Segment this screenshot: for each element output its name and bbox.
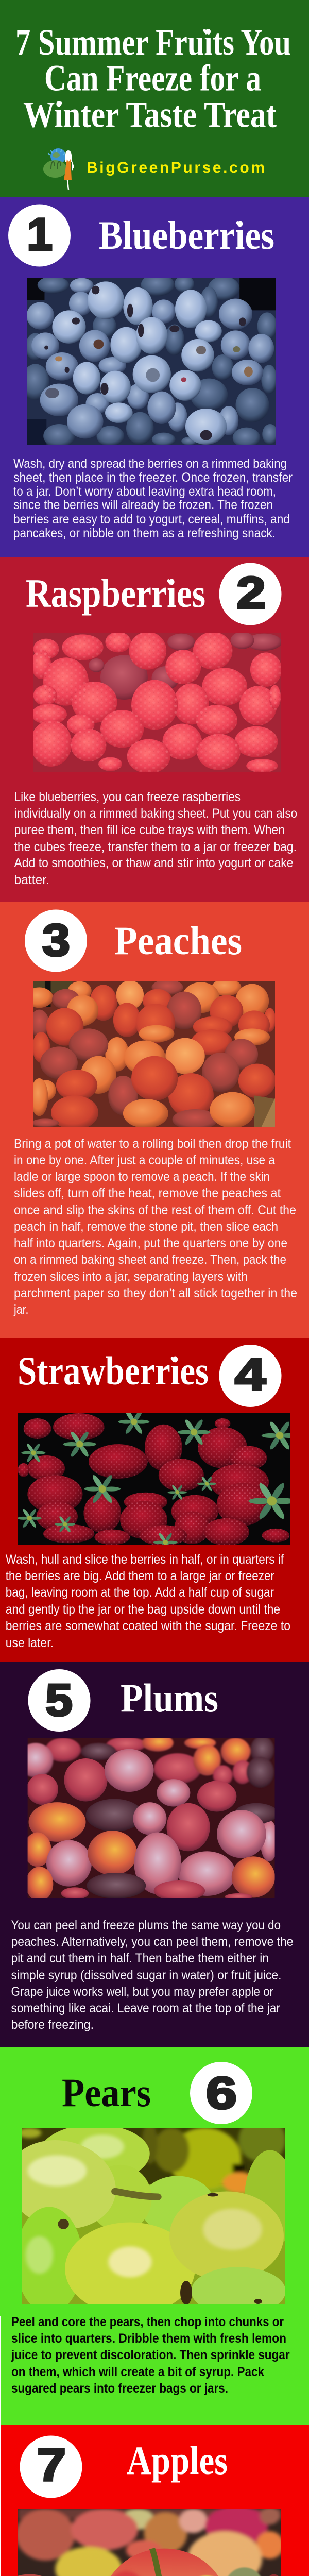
title [15, 22, 291, 135]
number badge 2 [219, 563, 281, 625]
description: pears: slice into quarters. Dribble them with fresh lemon [11, 2331, 286, 2346]
description: strawberries: bag, leaving room at the top. Add a half cup of sugar [6, 1585, 274, 1600]
description: peaches: Bring a pot of water to a rolling boil then drop the fruit [14, 1137, 291, 1151]
description: strawberries: use later. [6, 1636, 54, 1650]
description: strawberries: berries are somewhat coated with the sugar. Freeze to [6, 1619, 290, 1633]
number badge 1: 1 [27, 209, 53, 260]
panel: apples [0, 2425, 309, 2576]
description: blueberries: pancakes, or nibble on them as a refreshing snack. [13, 526, 276, 540]
description: plums: pit and cut them in half. Then bathe them either in [11, 1951, 269, 1965]
heading: Blueberries: Blueberries [99, 213, 274, 258]
panel: strawberries [0, 1338, 309, 1662]
description: peaches: jar. [13, 1302, 29, 1317]
photo: strawberries [18, 1413, 290, 1545]
number badge 6 [190, 2062, 252, 2124]
brand name: BigGreenPurse.com [87, 159, 265, 176]
description: peaches: ladle or large spoon to remove a peach. If the skin [14, 1170, 270, 1184]
description: strawberries: and gently tip the jar or the bag upside down until the [6, 1602, 280, 1617]
number badge 2: 2 [236, 567, 266, 618]
number badge 7: 7 [37, 2439, 66, 2490]
description: raspberries [14, 790, 297, 887]
description: peaches: frozen slices into a jar, separating layers with [14, 1269, 248, 1284]
heading: Strawberries: Strawberries [18, 1348, 209, 1393]
description: blueberries: since the berries will already be frozen. The frozen [13, 498, 273, 512]
number badge 5 [28, 1669, 91, 1732]
title: Can Freeze for a [44, 58, 261, 99]
panel: peaches [0, 902, 309, 1338]
description: peaches: slides off, turn off the heat, remove the peaches at [14, 1186, 281, 1200]
heading: Pears: Pears [62, 2070, 151, 2115]
number badge 5: 5 [45, 1674, 73, 1725]
photo: plums [28, 1738, 275, 1898]
description: strawberries [6, 1552, 290, 1650]
description: raspberries: Like blueberries, you can freeze raspberries [14, 790, 241, 804]
description: pears [11, 2315, 290, 2396]
description: strawberries: Wash, hull and slice the berries in half, or in quarters if [6, 1552, 284, 1567]
heading: Peaches: Peaches [114, 918, 242, 963]
number badge 6: 6 [206, 2067, 237, 2119]
photo: peaches [33, 981, 275, 1127]
heading: Strawberries: ♥ [170, 1355, 177, 1364]
description: strawberries: the berries are big. Add them to a large jar or freezer [6, 1569, 274, 1583]
description: blueberries: sheet, then place in the freezer. Once frozen, transfer [13, 470, 293, 485]
panel: blueberries [0, 197, 309, 557]
description: raspberries: batter. [14, 873, 49, 887]
description: plums [11, 1918, 294, 2032]
description: plums: Grape juice works well, but you may prefer apple or [11, 1985, 273, 1999]
photo: pears [22, 2128, 285, 2304]
number badge 1 [8, 204, 71, 267]
number badge 7 [20, 2436, 82, 2498]
description: blueberries [13, 456, 293, 540]
description: plums: You can peel and freeze plums the same way you do [11, 1918, 281, 1933]
panel: plums [0, 1662, 309, 2047]
icon: Big Green Purse logo [43, 148, 74, 190]
title: ♥ [202, 27, 210, 37]
description: pears: Peel and core the pears, then chop into chunks or [11, 2315, 284, 2329]
description: blueberries: to a jar. Don’t worry about leaving extra head room, [13, 484, 276, 499]
header panel [0, 0, 309, 197]
description: pears: on them, which will create a bit of syrup. Pack [11, 2365, 264, 2379]
heading: Apples: Apples [127, 2438, 228, 2483]
description: plums: before freezing. [11, 2018, 94, 2032]
description: blueberries: berries are easy to add to yogurt, cereal, muffins, and [13, 512, 290, 527]
number badge 3 [25, 910, 87, 972]
description: raspberries: puree them, then fill ice cube trays with them. When [14, 823, 285, 837]
description: plums: simple syrup (dissolved sugar in water) or fruit juice. [11, 1968, 281, 1982]
photo: apples [18, 2509, 281, 2576]
number badge 3: 3 [42, 914, 70, 965]
heading: Plums: Plums [121, 1675, 218, 1720]
heading: Blueberries: ♥ [235, 219, 243, 229]
panel: pears [0, 2047, 309, 2425]
heading: Raspberries: Raspberries [26, 571, 205, 616]
number badge 4: 4 [235, 1349, 266, 1400]
description: peaches: peach in half, remove the stone pit, then slice each [14, 1219, 278, 1234]
description: peaches [13, 1137, 297, 1317]
description: pears: sugared pears into freezer bags or jars. [11, 2381, 228, 2396]
description: plums: something like acai. Leave room at the top of the jar [11, 2001, 280, 2015]
title: ♥ [56, 100, 63, 109]
photo: blueberries [27, 278, 276, 445]
description: peaches: half into quarters. Again, put the quarters one by one [14, 1236, 287, 1250]
number badge 4 [219, 1345, 281, 1407]
description: peaches: once and slip the skins of the rest of them off. Cut the [14, 1203, 296, 1217]
description: peaches: in one by one. After just a couple of minutes, use a [14, 1153, 275, 1167]
photo: raspberries [33, 633, 281, 772]
heading: Raspberries: ♥ [166, 578, 174, 587]
panel: raspberries [0, 557, 309, 902]
